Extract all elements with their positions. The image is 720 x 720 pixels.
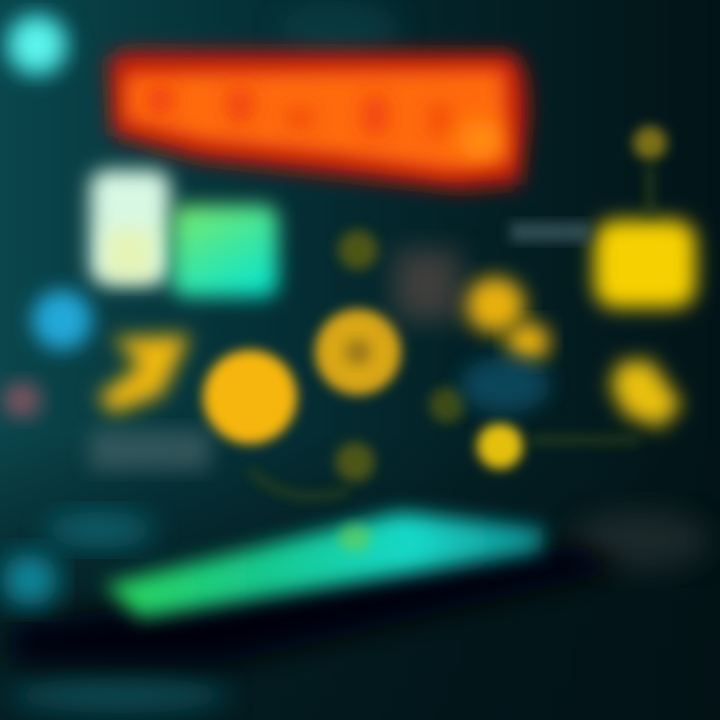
icon: pale card	[90, 170, 170, 284]
text placeholder blobs: muted panels	[2, 222, 590, 470]
connector nodes: dim olive dots	[250, 126, 667, 497]
title: glowing orange blurred heading	[108, 50, 528, 190]
icon: small yellow circle	[477, 423, 523, 469]
icon: yellow circle	[203, 350, 297, 444]
icon: yellow chevron	[98, 335, 190, 414]
icon: blue circle	[32, 290, 92, 350]
icon: green card	[172, 205, 278, 297]
icon: yellow diagonal shapes	[465, 277, 550, 362]
icon: gold target circle	[315, 309, 401, 395]
icon: yellow square	[594, 220, 696, 308]
icon: cyan circle	[1, 9, 73, 81]
icon: yellow lower-right shape	[610, 360, 682, 428]
phone: dark body with glowing screen	[2, 512, 625, 665]
